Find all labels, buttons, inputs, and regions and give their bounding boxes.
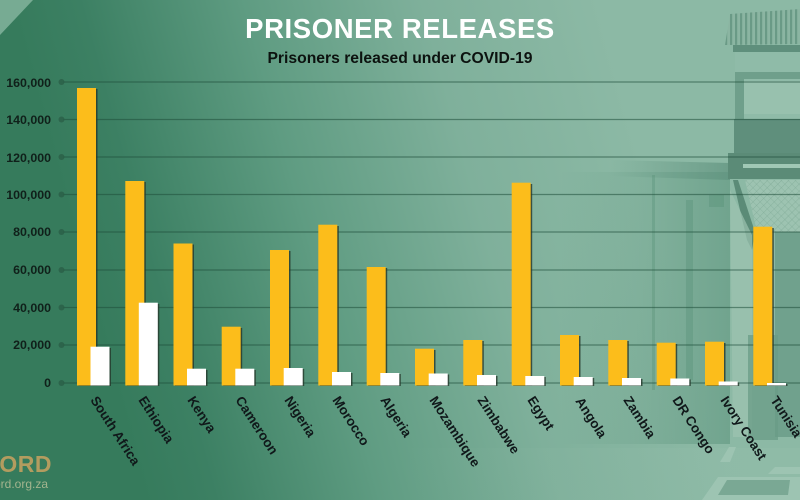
wall top with barbed wire [610, 160, 730, 180]
tower roof edge [733, 45, 800, 52]
country labels: Egypt [524, 393, 558, 433]
y axis labels: 80,000 [13, 225, 51, 239]
tower lower dark panel [734, 119, 800, 155]
fence area [745, 180, 800, 232]
country labels: South Africa [87, 393, 143, 468]
tower right dark base [775, 232, 800, 437]
wall pipe and box [652, 175, 724, 390]
bar chart [6, 76, 800, 470]
country labels: Cameroon [232, 393, 281, 457]
tower cabin [735, 52, 800, 120]
country labels: Mozambique [426, 393, 483, 470]
tower window frame left [735, 72, 744, 120]
grid lines [63, 82, 800, 383]
y axis labels: 40,000 [13, 301, 51, 315]
country labels: Zimbabwe [474, 393, 523, 457]
background photo: prison watchtower and wall [400, 9, 800, 500]
y axis labels: 20,000 [13, 338, 51, 352]
ground mat surround [702, 477, 800, 500]
small ground tile [768, 467, 800, 474]
y axis labels: 0 [44, 376, 51, 390]
y axis labels: 160,000 [6, 76, 51, 90]
prison wall [560, 172, 730, 444]
y axis labels [6, 76, 51, 390]
bar shadows [78, 89, 774, 386]
dark passage [748, 335, 778, 440]
country labels: Algeria [377, 393, 415, 440]
cabin frame [743, 72, 800, 79]
cabin window [744, 81, 800, 114]
country labels: Angola [572, 394, 610, 441]
white bar shadows [92, 304, 788, 386]
country labels: Morocco [329, 393, 372, 448]
steps [720, 447, 736, 462]
country labels: Ivory Coast [717, 393, 770, 463]
tower roof [725, 9, 800, 45]
corner triangle decoration [0, 0, 33, 35]
ground band [400, 448, 800, 500]
subtitle: Prisoners released under COVID-19 [267, 50, 533, 67]
country labels: Ethiopia [135, 393, 177, 446]
tower platform [728, 153, 800, 179]
fence strut [733, 180, 755, 250]
y axis labels: 140,000 [6, 113, 51, 127]
light pillar [730, 190, 752, 437]
country labels: DR Congo [669, 393, 718, 457]
title: PRISONER RELEASES [245, 13, 555, 44]
ground mat [718, 480, 790, 495]
y axis labels: 60,000 [13, 263, 51, 277]
y axis labels: 120,000 [6, 151, 51, 165]
logo wordmark: ORD [0, 451, 52, 477]
country labels: Nigeria [281, 393, 319, 440]
country labels: Kenya [184, 393, 219, 436]
white bars [90, 303, 786, 386]
platform highlights [743, 164, 800, 168]
y axis labels: 100,000 [6, 188, 51, 202]
country labels: Zambia [620, 393, 659, 441]
yellow bars [77, 88, 772, 386]
country labels [87, 393, 800, 470]
logo [0, 451, 52, 491]
axis tick dots [58, 79, 64, 386]
